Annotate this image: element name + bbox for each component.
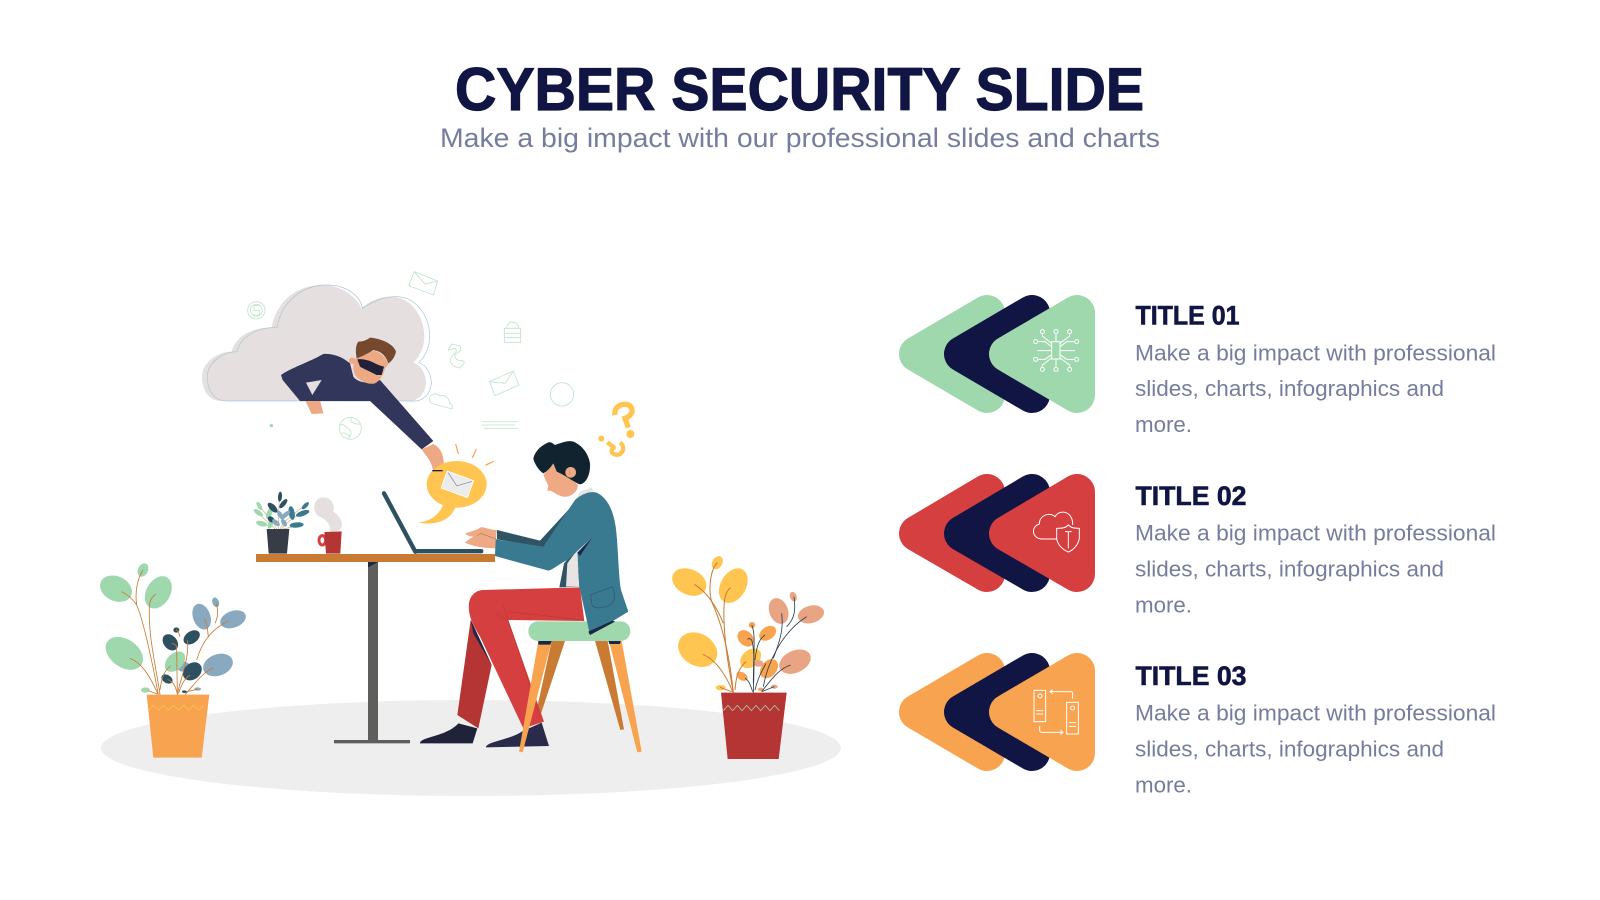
hacker (281, 338, 444, 472)
desk plant (253, 492, 310, 554)
coffee cup with steam (314, 497, 342, 554)
chevron triangles red (917, 492, 1077, 574)
red trousers (469, 587, 584, 728)
question marks (598, 404, 634, 455)
front shoe (486, 723, 549, 747)
rear leg (420, 619, 492, 743)
head (533, 441, 590, 497)
front stool legs and seat (519, 621, 642, 752)
floor ellipse (101, 700, 841, 796)
text 2 (1135, 520, 1496, 618)
text 3: Make a big impact with professional (1135, 700, 1496, 726)
text 3 (1135, 700, 1496, 798)
text 2: slides, charts, infographics and (1135, 556, 1444, 582)
left potted plant (96, 562, 248, 758)
text 3: more. (1135, 772, 1192, 798)
item 1 (917, 300, 1496, 437)
line doodles (248, 272, 574, 439)
chevron triangles green (917, 313, 1077, 395)
laptop (384, 493, 483, 553)
right potted plant (668, 554, 826, 759)
text 1: Make a big impact with professional (1135, 340, 1496, 366)
shirt (559, 487, 594, 587)
text 2: Make a big impact with professional (1135, 520, 1496, 546)
cloud and hacker (202, 272, 634, 524)
text 2: more. (1135, 592, 1192, 618)
table with desk items (253, 492, 495, 743)
heading 3: TITLE 03 (1136, 661, 1246, 691)
hand (465, 527, 497, 548)
chevron triangles orange (917, 671, 1077, 753)
title: CYBER SECURITY SLIDE (455, 55, 1144, 123)
text 1: slides, charts, infographics and (1135, 376, 1444, 401)
text 3: slides, charts, infographics and (1135, 736, 1444, 762)
heading 1: TITLE 01 (1136, 300, 1240, 330)
table (256, 554, 495, 743)
back stool legs (537, 641, 624, 730)
yellow mail bubble (417, 444, 494, 524)
heading 2: TITLE 02 (1136, 481, 1246, 511)
cloud (202, 285, 431, 401)
subtitle: Make a big impact with our professional slides and charts (440, 123, 1160, 153)
icon: server exchange (1034, 690, 1078, 734)
icon: cloud shield (1033, 512, 1079, 552)
seated man (420, 441, 642, 752)
item 2 (917, 481, 1496, 618)
text 1: more. (1135, 412, 1192, 437)
item 3 (917, 661, 1496, 798)
icon: circuit chip (1034, 330, 1079, 371)
teal jacket (495, 492, 628, 635)
text 1 (1135, 340, 1496, 437)
illustration: cyber attack scene (96, 272, 841, 796)
